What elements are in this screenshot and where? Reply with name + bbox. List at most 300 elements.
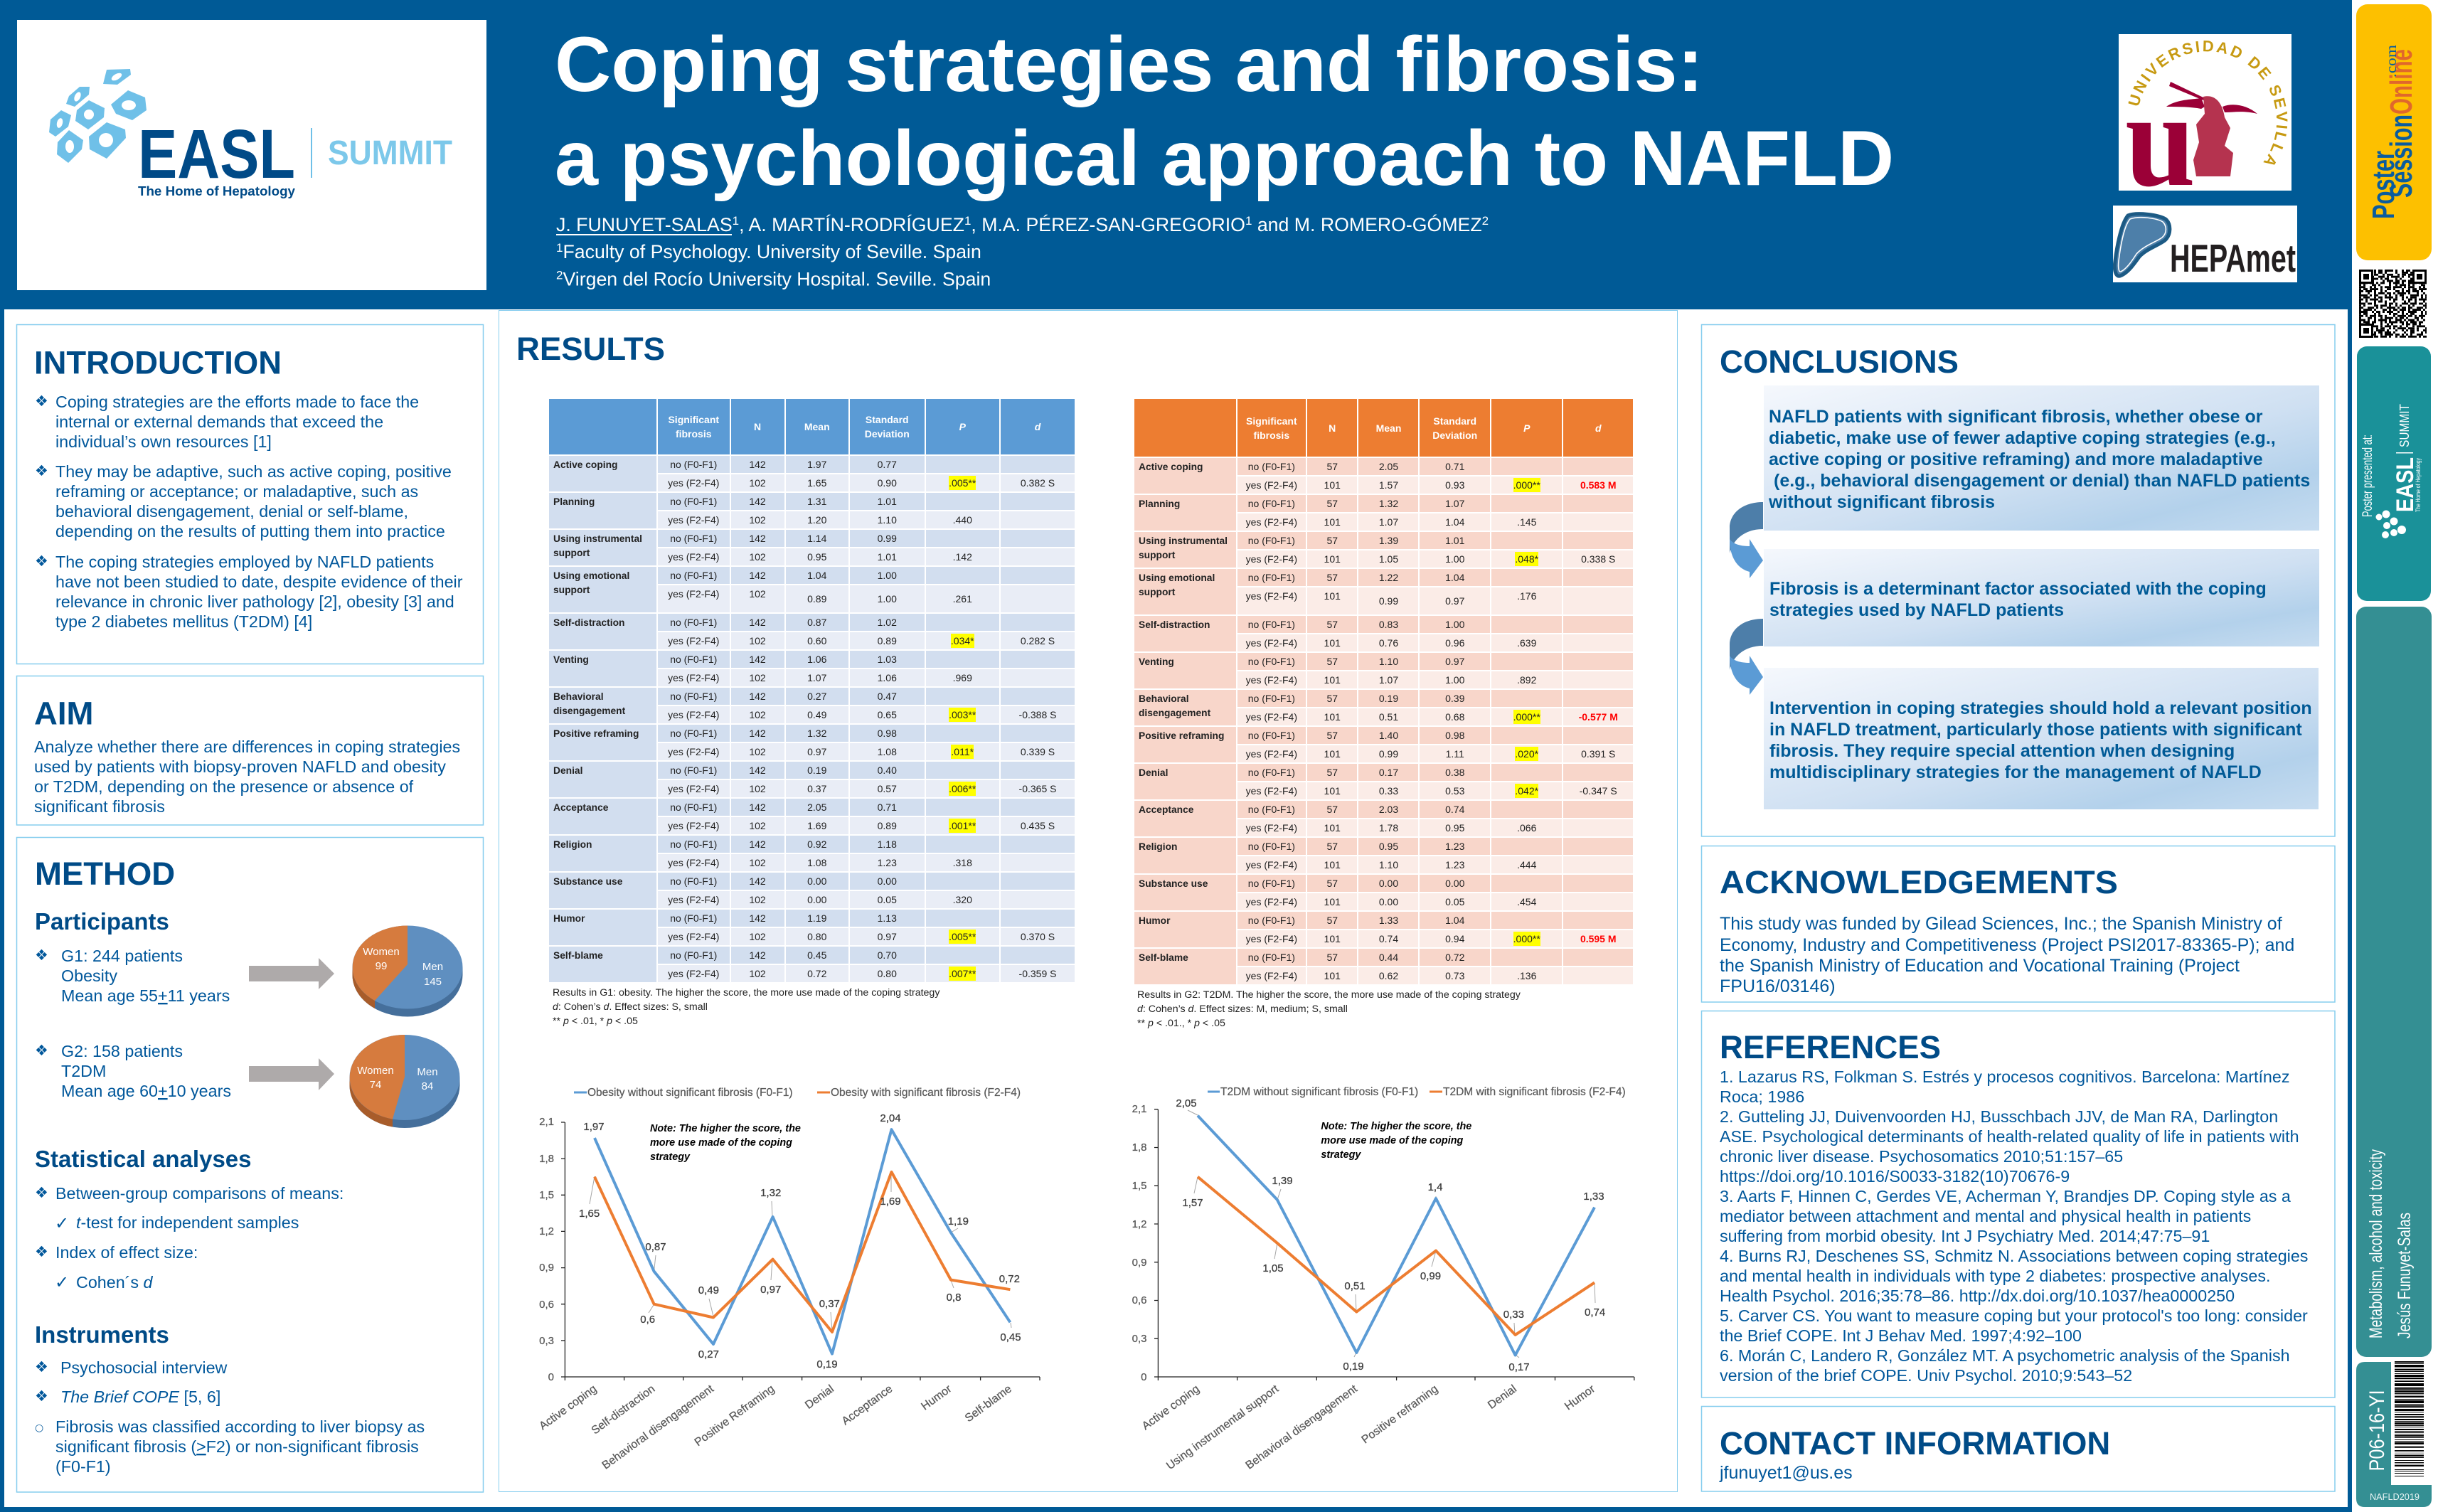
x axis labels: Self-distraction: [590, 1383, 657, 1437]
table: obesity group results: no (F0-F1): [670, 728, 717, 739]
table: T2DM group results: 1.00: [1445, 674, 1464, 686]
y axis labels: 0,6: [1132, 1294, 1146, 1306]
session info bar: Jesús Funuyet-Salas: [2395, 1213, 2415, 1338]
table: obesity group results: -0.388 S: [1019, 709, 1056, 720]
reference list: the Brief COPE. Int J Behav Med. 1997;4:92–100: [1720, 1326, 2082, 1345]
table: T2DM group results: 1.07: [1379, 674, 1398, 686]
table: obesity group results: yes (F2-F4): [668, 820, 719, 831]
table: T2DM group results: Venting: [1139, 656, 1174, 667]
table: T2DM group results: 0.17: [1379, 767, 1398, 778]
authors: , M.A. PÉREZ-SAN-GREGORIO: [971, 214, 1245, 235]
table: obesity group results: 0.77: [878, 459, 897, 470]
table: T2DM group results: Self-distraction: [1139, 619, 1210, 630]
panel: introduction: [16, 324, 484, 664]
table: T2DM group results: 0.97: [1445, 656, 1464, 667]
y axis labels: 1,5: [539, 1189, 554, 1201]
table: T2DM group results: 1.00: [1445, 619, 1464, 630]
table: T2DM group results: .145: [1517, 516, 1536, 528]
table: obesity group results: 102: [749, 551, 766, 563]
title: [555, 21, 1894, 202]
table: obesity group results: 1.18: [878, 838, 897, 850]
data labels: 1,57: [1182, 1197, 1203, 1209]
line chart: obesity: [537, 1087, 1040, 1472]
table: obesity group results: 102: [749, 968, 766, 979]
poster ID tag: P06-16-YI: [2365, 1390, 2389, 1471]
table: obesity group results: .440: [953, 514, 972, 526]
reference list: version of the brief COPE. Univ Psychol. 2010;9:543–52: [1720, 1366, 2132, 1385]
group 2 description: G2: 158 patients: [61, 1042, 183, 1060]
table: obesity group results: 142: [749, 912, 766, 924]
table: obesity group results: 0.65: [878, 709, 897, 720]
table: obesity group results: Planning: [553, 496, 595, 507]
table: obesity group results: 0.49: [807, 709, 826, 720]
table: obesity group results: Using instrumental support: [553, 533, 642, 558]
table: T2DM group results: no (F0-F1): [1248, 535, 1295, 546]
table: obesity group results: 1.97: [807, 459, 826, 470]
table: obesity group results: no (F0-F1): [670, 912, 717, 924]
table: obesity group results: 0.00: [878, 875, 897, 887]
data labels: [579, 1112, 1021, 1370]
table: obesity group results: 0.00: [807, 875, 826, 887]
table: obesity group results: .318: [953, 857, 972, 868]
bullet list: introduction text: relevance in chronic liver pathology [2], obesity [3] and: [55, 592, 454, 611]
table: T2DM group results: 0.73: [1445, 970, 1464, 981]
table: obesity group results: 0.89: [807, 593, 826, 605]
table: T2DM group results: 1.07: [1379, 516, 1398, 528]
table: obesity group results: yes (F2-F4): [668, 857, 719, 868]
table: obesity group results: 142: [749, 838, 766, 850]
reference list: 3. Aarts F, Hinnen C, Gerdes VE, Acherman Y, Brandjes DP. Coping style as a: [1720, 1187, 2291, 1205]
x axis labels: Positive reframing: [1360, 1383, 1440, 1447]
pie chart: group 1 sex: 145: [424, 976, 442, 988]
PosterSessionOnline badge: Session: [2384, 115, 2419, 198]
statistical analyses list: [35, 1184, 344, 1292]
table: obesity group results: 142: [749, 691, 766, 702]
legend: [574, 1087, 1021, 1099]
title: a psychological approach to NAFLD: [555, 115, 1894, 202]
table: T2DM group results: 101: [1324, 516, 1341, 528]
aim text: [34, 738, 460, 816]
table: T2DM group results: 57: [1326, 804, 1338, 815]
x axis labels: Active coping: [537, 1383, 599, 1432]
table: obesity group results: 1.01: [878, 496, 897, 507]
instruments list: (F0-F1): [55, 1457, 111, 1476]
pie chart: group 2 sex: [350, 1035, 459, 1128]
table: obesity group results: 1.19: [807, 912, 826, 924]
blue series: without fibrosis: [1198, 1116, 1595, 1356]
data labels: 0,6: [640, 1314, 655, 1326]
bullet list: introduction text: type 2 diabetes mellitus (T2DM) [4]: [55, 612, 312, 631]
table note: obesity: ** p < .01, * p < .05: [553, 1016, 638, 1027]
note: strategy: [650, 1151, 691, 1163]
table: obesity group results: 0.89: [878, 820, 897, 831]
x axis labels: Humor: [920, 1383, 954, 1412]
conclusion box 3: in NAFLD treatment, particularly those patients with significant: [1769, 720, 2302, 740]
table: T2DM group results: .042*: [1515, 785, 1538, 797]
logo: Universidad de Sevilla: UNIVERSIDAD DE SEVILLA: [2128, 41, 2287, 165]
x axis labels: Denial: [803, 1383, 836, 1412]
table: T2DM group results: 57: [1326, 878, 1338, 889]
table: obesity group results: no (F0-F1): [670, 838, 717, 850]
table: T2DM group results: Positive reframing: [1139, 730, 1224, 741]
instruments list: [35, 1358, 425, 1476]
conclusion box 1: (e.g., behavioral disengagement or denial) than NAFLD patients: [1774, 471, 2310, 491]
table: obesity group results: yes (F2-F4): [668, 746, 719, 757]
table: obesity group results: 0.40: [878, 765, 897, 776]
note: [1321, 1121, 1471, 1161]
data labels: 1,69: [880, 1196, 901, 1208]
table: T2DM group results: 0.00: [1445, 878, 1464, 889]
table: obesity group results: 1.65: [807, 477, 826, 489]
table: obesity group results: 1.14: [807, 533, 826, 544]
table: T2DM group results: Religion: [1139, 841, 1177, 852]
table: T2DM group results: 101: [1324, 748, 1341, 760]
table: T2DM group results: 101: [1324, 785, 1341, 797]
reference list: chronic liver disease. Psychosomatics 2010;51:157–65: [1720, 1147, 2123, 1166]
data labels: 0,37: [819, 1298, 840, 1310]
table: T2DM group results: 1.23: [1445, 841, 1464, 852]
table: obesity group results: 0.90: [878, 477, 897, 489]
table: obesity group results: Positive reframing: [553, 728, 639, 739]
table: obesity group results: 0.89: [878, 635, 897, 646]
data labels: [1176, 1097, 1605, 1373]
orange series: with fibrosis: [1198, 1177, 1595, 1335]
table: obesity group results: fibrosis: [676, 428, 712, 440]
table: obesity group results: 1.07: [807, 672, 826, 683]
table: T2DM group results: 101: [1324, 859, 1341, 871]
table: obesity group results: 0.57: [878, 783, 897, 794]
table: obesity group results: 102: [749, 746, 766, 757]
panel: acknowledgements: [1701, 845, 2336, 1003]
panel: conclusions: [1701, 324, 2336, 837]
table: obesity group results: yes (F2-F4): [668, 672, 719, 683]
table: obesity group results: 0.71: [878, 802, 897, 813]
statistical analyses list: Between-group comparisons of means:: [55, 1184, 344, 1203]
table: T2DM group results: 1.04: [1445, 516, 1464, 528]
EASL Summit badge: The Home of Hepatology: [2415, 458, 2422, 512]
table: obesity group results: 0.97: [807, 746, 826, 757]
reference list: 2. Gutteling JJ, Duivenvoorden HJ, Busschbach JJV, de Man RA, Darlington: [1720, 1107, 2278, 1126]
conclusion box 1: NAFLD patients with significant fibrosis, whether obese or: [1769, 407, 2263, 427]
group 1 description: ❖: [35, 947, 48, 964]
bullet list: introduction text: behavioral disengagement, denial or self-blame,: [55, 502, 408, 521]
table note: T2DM: [1137, 989, 1521, 1029]
y axis labels: 1,5: [1132, 1180, 1146, 1192]
conclusion box 1: without significant fibrosis: [1768, 492, 1995, 512]
table: T2DM group results: 0.68: [1445, 711, 1464, 723]
table: obesity group results: 1.03: [878, 654, 897, 665]
table: obesity group results: 1.69: [807, 820, 826, 831]
table: obesity group results: d: [1035, 421, 1040, 432]
title and authors: [555, 21, 1894, 290]
table: T2DM group results: yes (F2-F4): [1246, 933, 1297, 944]
table: T2DM group results: 57: [1326, 619, 1338, 630]
table: T2DM group results: Mean: [1376, 422, 1401, 434]
reference list: 4. Burns RJ, Deschenes SS, Schmitz N. Associations between coping strategies: [1720, 1247, 2308, 1265]
authors: 2: [1482, 214, 1489, 228]
table: T2DM group results: 0.95: [1445, 822, 1464, 834]
table: T2DM group results: no (F0-F1): [1248, 804, 1295, 815]
reference list: and mental health in individuals with type 2 diabetes: prospective analyses.: [1720, 1267, 2270, 1285]
heading: results: RESULTS: [516, 331, 665, 367]
table: T2DM group results: yes (F2-F4): [1246, 711, 1297, 723]
PosterSessionOnline badge: [2356, 4, 2432, 260]
table: obesity group results: 2.05: [807, 802, 826, 813]
table: obesity group results: 102: [749, 672, 766, 683]
table: T2DM group results: yes (F2-F4): [1246, 970, 1297, 981]
statistical analyses list: ✓: [55, 1272, 69, 1292]
logo: HEPAmet: [2113, 206, 2297, 282]
table: T2DM group results: no (F0-F1): [1248, 730, 1295, 741]
statistical analyses list: ❖: [35, 1243, 48, 1260]
data labels: 1,65: [579, 1208, 600, 1220]
table: T2DM group results: 101: [1324, 711, 1341, 723]
table: T2DM group results: 0.95: [1379, 841, 1398, 852]
table: T2DM group results: yes (F2-F4): [1246, 748, 1297, 760]
table: obesity group results: 0.339 S: [1021, 746, 1055, 757]
table: T2DM group results: 1.00: [1445, 553, 1464, 565]
email: jfunuyet1@us.es: [1719, 1463, 1853, 1483]
data labels: 0,27: [698, 1348, 719, 1361]
y axis labels: 0,3: [539, 1335, 554, 1347]
acknowledgements text: FPU16/03146): [1720, 976, 1836, 996]
table: obesity group results: 1.20: [807, 514, 826, 526]
authors: , A. MARTÍN-RODRÍGUEZ: [739, 214, 964, 235]
table: obesity group results: .003**: [949, 709, 976, 720]
conclusion box 2: strategies used by NAFLD patients: [1769, 600, 2064, 620]
pie chart: group 1 sex: Women: [363, 946, 400, 958]
table: obesity group results: 0.45: [807, 949, 826, 961]
table: obesity group results: yes (F2-F4): [668, 514, 719, 526]
table: T2DM group results: 0.93: [1445, 479, 1464, 491]
x axis labels: Self-blame: [963, 1383, 1014, 1425]
y axis labels: [1132, 1103, 1146, 1383]
table: obesity group results: 142: [749, 949, 766, 961]
table: T2DM group results: 0.391 S: [1581, 748, 1615, 760]
table: T2DM group results: no (F0-F1): [1248, 841, 1295, 852]
table: T2DM group results: 57: [1326, 498, 1338, 509]
table: obesity group results: Self-distraction: [553, 617, 624, 628]
table: obesity group results: -0.365 S: [1019, 783, 1056, 794]
conclusion box 3: multidisciplinary strategies for the management of NAFLD: [1769, 762, 2262, 782]
table: T2DM group results: Substance use: [1139, 878, 1208, 889]
reference list: https://doi.org/10.1016/S0033-3182(10)70676-9: [1720, 1167, 2070, 1186]
table: obesity group results: yes (F2-F4): [668, 931, 719, 942]
reference list: 5. Carver CS. You want to measure coping but your protocol's too long: consider: [1720, 1306, 2308, 1325]
table: T2DM group results: Self-blame: [1139, 952, 1188, 963]
table: obesity group results: 102: [749, 931, 766, 942]
heading: statistical analyses: Statistical analyses: [35, 1146, 252, 1172]
leader lines: [590, 1172, 1011, 1331]
PosterSessionOnline badge: .com: [2384, 44, 2400, 78]
table: T2DM group results: 101: [1324, 674, 1341, 686]
table: obesity group results: Religion: [553, 839, 592, 850]
table: T2DM group results: 0.71: [1445, 461, 1464, 472]
table: T2DM group results: 1.23: [1445, 859, 1464, 871]
table: obesity group results: no (F0-F1): [670, 617, 717, 628]
conclusion box 1: active coping or positive reframing) and more maladaptive: [1769, 449, 2263, 469]
table: obesity group results: 142: [749, 533, 766, 544]
table: obesity group results: 0.05: [878, 894, 897, 905]
data labels: 0,33: [1503, 1309, 1524, 1321]
QR finder patterns: [2359, 270, 2427, 338]
EASL Summit logo: The Home of Hepatology: [138, 184, 295, 198]
table: T2DM group results: 57: [1326, 915, 1338, 926]
table: T2DM group results: no (F0-F1): [1248, 619, 1295, 630]
table: obesity group results: .007**: [949, 968, 976, 979]
data labels: 1,4: [1428, 1181, 1442, 1193]
table: obesity group results: Venting: [553, 654, 589, 665]
bullet list: introduction text: have not been studied to date, despite evidence of their: [55, 573, 463, 591]
instruments list: Fibrosis was classified according to liver biopsy as: [55, 1417, 425, 1436]
table: obesity group results: no (F0-F1): [670, 533, 717, 544]
table: T2DM group results: 0.99: [1379, 748, 1398, 760]
table: T2DM group results: 101: [1324, 822, 1341, 834]
blue series: without fibrosis: [595, 1129, 1010, 1354]
legend: Obesity with significant fibrosis (F2-F4): [831, 1087, 1021, 1099]
table: obesity group results: 142: [749, 496, 766, 507]
heading: method: METHOD: [35, 856, 175, 892]
note: [650, 1123, 801, 1163]
EASL Summit badge: EASL: [2392, 457, 2419, 512]
table: obesity group results: yes (F2-F4): [668, 894, 719, 905]
table: T2DM group results: Denial: [1139, 767, 1168, 778]
data labels: 0,74: [1585, 1306, 1605, 1319]
table: T2DM group results: 0.05: [1445, 896, 1464, 907]
bullet list: introduction text: [35, 393, 463, 631]
table: obesity group results: Standard: [866, 414, 909, 425]
table: T2DM group results: yes (F2-F4): [1246, 674, 1297, 686]
table: obesity group results: 0.70: [878, 949, 897, 961]
table: T2DM group results: 0.44: [1379, 952, 1398, 963]
panel: aim: [16, 676, 484, 826]
table: obesity group results: no (F0-F1): [670, 765, 717, 776]
axes: [1154, 1109, 1634, 1380]
table: T2DM group results: P: [1523, 422, 1530, 434]
table: obesity group results: 0.282 S: [1021, 635, 1055, 646]
table: obesity group results: P: [959, 421, 966, 432]
table: obesity group results: no (F0-F1): [670, 570, 717, 581]
conclusion box 2: Fibrosis is a determinant factor associated with the coping: [1769, 579, 2267, 599]
heading: instruments: Instruments: [35, 1321, 169, 1348]
table: obesity group results: 102: [749, 635, 766, 646]
table: obesity group results: no (F0-F1): [670, 459, 717, 470]
statistical analyses list: Index of effect size:: [55, 1243, 198, 1262]
table: T2DM group results: 57: [1326, 730, 1338, 741]
table: obesity group results: 0.92: [807, 838, 826, 850]
table: T2DM group results: Using instrumental support: [1139, 536, 1228, 560]
EASL Summit badge: SUMMIT: [2397, 404, 2412, 447]
table: obesity group results: 1.06: [878, 672, 897, 683]
table: T2DM group results: 0.72: [1445, 952, 1464, 963]
table: T2DM group results: yes (F2-F4): [1246, 859, 1297, 871]
bullet list: introduction text: ❖: [35, 462, 48, 479]
arrow: group 2 to pie: [249, 1058, 334, 1090]
table: obesity group results: Using emotional support: [553, 570, 629, 595]
table: T2DM group results: 57: [1326, 767, 1338, 778]
table: obesity group results: 0.95: [807, 551, 826, 563]
table: T2DM group results: d: [1595, 422, 1602, 434]
table: T2DM group results: 1.04: [1445, 572, 1464, 583]
table: obesity group results: yes (F2-F4): [668, 477, 719, 489]
table: T2DM group results: 57: [1326, 572, 1338, 583]
panel: method: [16, 836, 484, 1493]
table: obesity group results: 0.60: [807, 635, 826, 646]
table: obesity group results: no (F0-F1): [670, 875, 717, 887]
pie chart: group 2 sex: Men: [417, 1066, 438, 1078]
table: T2DM group results: no (F0-F1): [1248, 952, 1295, 963]
group 2 description: [35, 1042, 231, 1100]
table: obesity group results: 142: [749, 765, 766, 776]
table: obesity group results: 0.80: [878, 968, 897, 979]
data labels: 0,51: [1344, 1280, 1366, 1292]
instruments list: significant fibrosis (>F2) or non-significant fibrosis: [55, 1437, 419, 1456]
table: T2DM group results: Humor: [1139, 915, 1170, 926]
table: T2DM group results: no (F0-F1): [1248, 572, 1295, 583]
pie chart: group 1 sex: [353, 926, 462, 1016]
table: T2DM group results: .020*: [1515, 748, 1538, 760]
table: obesity group results: 102: [749, 709, 766, 720]
table: obesity group results: Behavioral disengagement: [553, 691, 625, 716]
x axis labels: Behavioral disengagement: [600, 1383, 716, 1472]
table: obesity group results: no (F0-F1): [670, 496, 717, 507]
panel: contact information: [1701, 1405, 2336, 1492]
table note: T2DM: d: Cohen’s d. Effect sizes: M, medium; S, small: [1137, 1003, 1348, 1015]
bullet list: introduction text: The coping strategies employed by NAFLD patients: [55, 553, 434, 571]
group 1 description: Mean age 55+11 years: [61, 986, 230, 1005]
table: obesity group results: .006**: [949, 783, 976, 794]
panel: results: [499, 310, 1678, 1492]
table: T2DM group results: no (F0-F1): [1248, 767, 1295, 778]
EASL Summit badge: Poster presented at:: [2360, 435, 2375, 517]
authors: 1: [964, 214, 971, 228]
table: T2DM group results: 101: [1324, 637, 1341, 649]
y axis labels: 1,8: [1132, 1141, 1146, 1154]
table: T2DM group results: 57: [1326, 461, 1338, 472]
poster ID tag: NAFLD2019: [2370, 1491, 2420, 1502]
QR code: [2359, 270, 2427, 336]
table: T2DM group results: yes (F2-F4): [1246, 479, 1297, 491]
table: T2DM group results: 2.03: [1379, 804, 1398, 815]
table: obesity group results: Mean: [804, 421, 830, 432]
table: T2DM group results: Deviation: [1432, 430, 1477, 441]
EASL Summit logo: SUMMIT: [328, 134, 452, 172]
table: T2DM group results: 101: [1324, 970, 1341, 981]
heading: aim: AIM: [34, 696, 93, 732]
instruments list: ○: [35, 1422, 43, 1434]
table: T2DM group results: 0.51: [1379, 711, 1398, 723]
data labels: 0,97: [760, 1284, 781, 1296]
table: T2DM group results: 0.53: [1445, 785, 1464, 797]
table: T2DM group results: -0.577 M: [1579, 711, 1618, 723]
table: T2DM group results: 101: [1324, 479, 1341, 491]
table: T2DM group results: 101: [1324, 553, 1341, 565]
table: obesity group results: 142: [749, 875, 766, 887]
table: T2DM group results: .000**: [1513, 711, 1540, 723]
data labels: 1,05: [1262, 1262, 1284, 1274]
acknowledgements text: This study was funded by Gilead Sciences, Inc.; the Spanish Ministry of: [1720, 914, 2282, 934]
EASL Summit badge: [2357, 346, 2431, 601]
data labels: 0,99: [1420, 1270, 1441, 1282]
y axis labels: 0,9: [539, 1262, 554, 1274]
x axis labels: Behavioral disengagement: [1244, 1383, 1360, 1472]
data labels: 0,72: [999, 1273, 1020, 1285]
table: obesity group results: 0.37: [807, 783, 826, 794]
table: T2DM group results: 0.595 M: [1580, 933, 1617, 944]
bullet list: introduction text: They may be adaptive, such as active coping, positive: [55, 462, 452, 481]
table: obesity group results: .034*: [951, 635, 974, 646]
table: T2DM group results: N: [1329, 422, 1336, 434]
